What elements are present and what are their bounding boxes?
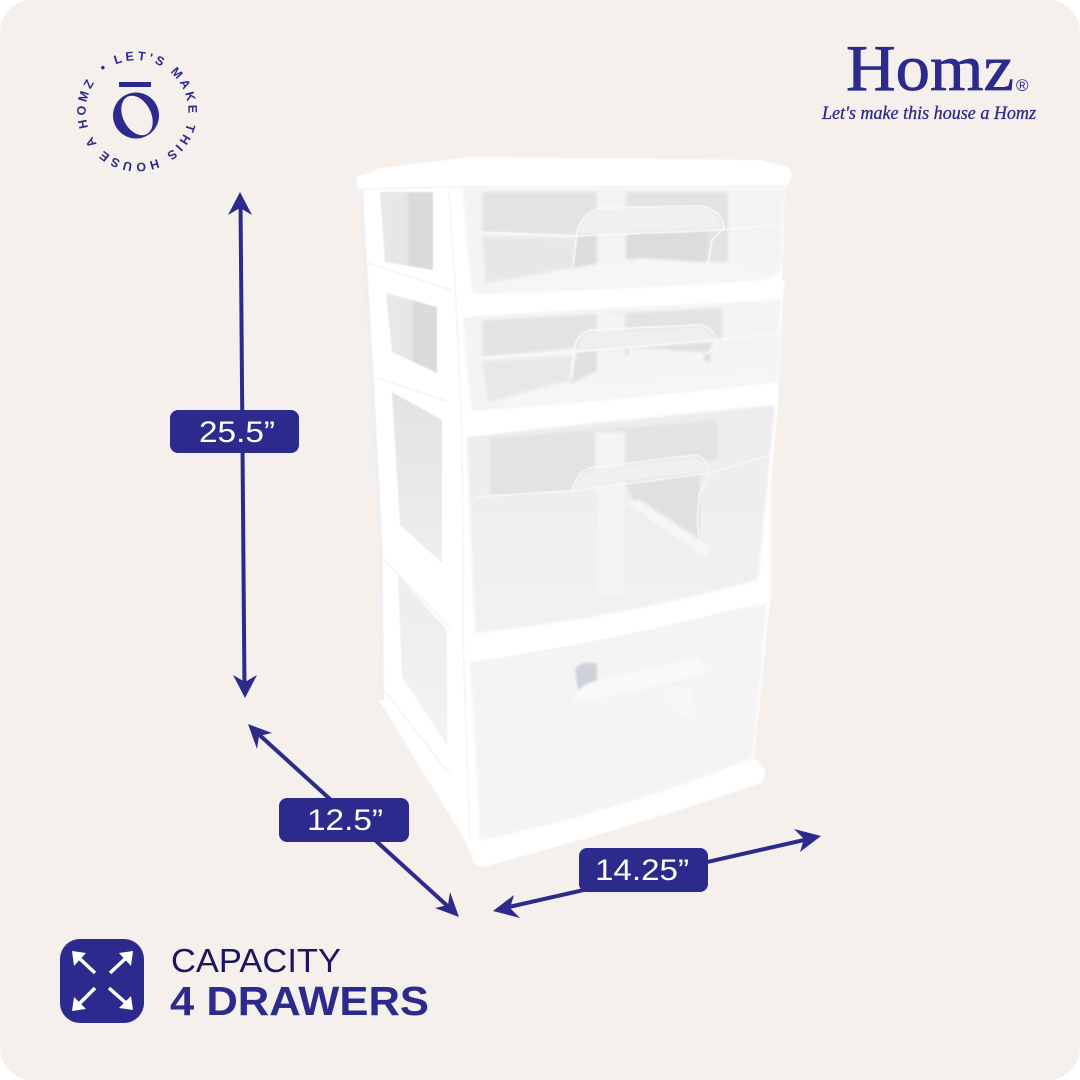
height label: 25.5”	[199, 416, 275, 449]
top drawer	[463, 187, 785, 294]
fourth drawer	[470, 603, 767, 840]
Homz logo	[821, 32, 1037, 124]
left post shading	[358, 190, 384, 700]
side window 4	[398, 575, 447, 745]
badge macron o mark	[113, 82, 159, 141]
side window 3	[392, 392, 442, 563]
badge ring text: • LET'S MAKE THIS HOUSE A HOMZ	[77, 51, 197, 172]
capacity icon	[60, 939, 144, 1023]
capacity text: CAPACITY	[171, 943, 341, 980]
third drawer handle	[475, 455, 770, 550]
Homz logo: Homz	[846, 32, 1014, 105]
width label	[579, 848, 708, 892]
tagline: Let's make this house a Homz	[821, 103, 1037, 124]
height label	[170, 410, 299, 453]
drawer front rails	[457, 282, 783, 866]
depth label	[279, 798, 409, 842]
height dimension arrow	[170, 192, 299, 698]
product image: four drawer storage unit	[356, 157, 791, 867]
third drawer	[467, 405, 775, 633]
depth dimension arrow	[248, 724, 459, 917]
width label: 14.25”	[595, 854, 689, 887]
capacity text	[170, 943, 429, 1024]
unit silhouette	[356, 157, 791, 867]
side window 1	[380, 192, 433, 270]
width dimension arrow	[493, 829, 821, 918]
registered mark: ®	[1016, 76, 1029, 95]
frame rail shading	[357, 186, 785, 840]
depth label: 12.5”	[307, 804, 383, 837]
second drawer handle	[473, 325, 780, 378]
top drawer handle	[473, 206, 782, 266]
drawer count: 4 DRAWERS	[170, 978, 429, 1024]
circular brand badge	[77, 51, 197, 172]
fourth drawer rim	[480, 655, 757, 717]
second drawer	[463, 300, 781, 411]
side window 2	[386, 293, 437, 373]
